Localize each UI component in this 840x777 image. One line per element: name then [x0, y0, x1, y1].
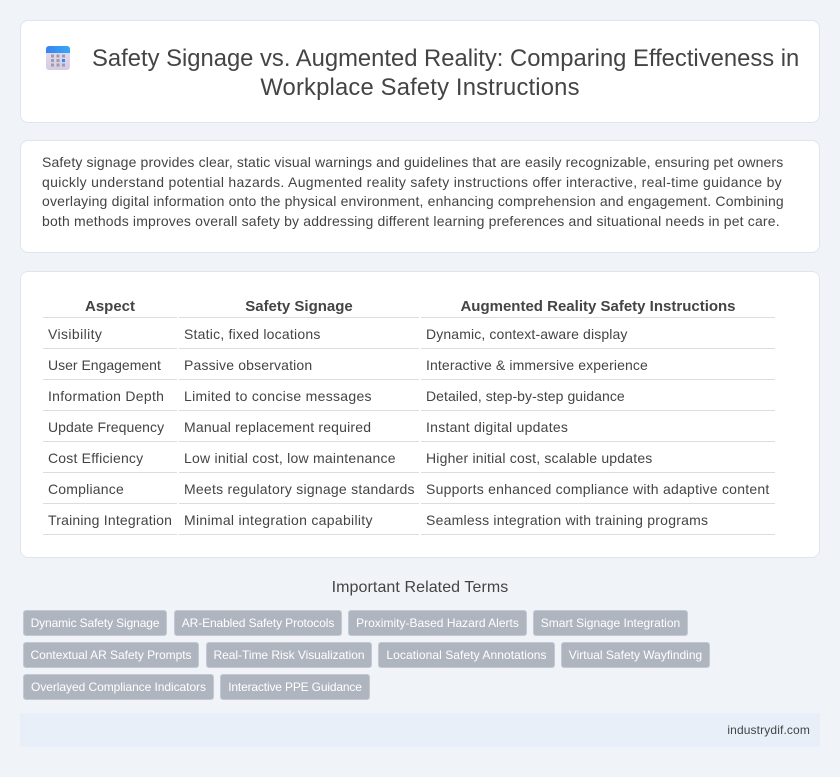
header: safety signage: Safety Signage: [245, 298, 353, 315]
row: update frequency: Instant digital updates: [426, 419, 568, 435]
row: compliance: [48, 481, 770, 497]
tag: Locational Safety Annotations: [386, 648, 547, 662]
title: [92, 45, 799, 101]
row: visibility: Static, fixed locations: [184, 326, 321, 342]
row: user engagement: User Engagement: [48, 357, 161, 373]
tag: Smart Signage Integration: [541, 616, 680, 630]
tag: Real-Time Risk Visualization: [214, 648, 364, 662]
related terms heading: Important Related Terms: [332, 579, 508, 596]
intro paragraph: [42, 154, 784, 229]
row: visibility: Dynamic, context-aware display: [426, 326, 628, 342]
title: Safety Signage vs. Augmented Reality: Comparing Effectiveness in: [92, 45, 799, 72]
row: information depth: [48, 388, 625, 404]
tag: [378, 642, 555, 668]
row: training integration: Training Integration: [48, 512, 172, 528]
row: compliance: Meets regulatory signage standards: [184, 481, 415, 497]
intro paragraph: overlaying digital information onto the physical environment, enhancing comprehension and engagement. Combining: [42, 193, 784, 209]
row: update frequency: Update Frequency: [48, 419, 164, 435]
row: information depth: Information Depth: [48, 388, 164, 404]
row: visibility: Visibility: [48, 326, 102, 342]
row: user engagement: Passive observation: [184, 357, 312, 373]
row: user engagement: Interactive & immersive experience: [426, 357, 648, 373]
panel: comparison table card: [20, 271, 820, 558]
panel: title card: [20, 20, 820, 123]
row: training integration: Seamless integration with training programs: [426, 512, 708, 528]
row: compliance: Supports enhanced compliance with adaptive content: [426, 481, 770, 497]
row: cost efficiency: [48, 450, 652, 466]
tag: [23, 642, 199, 668]
row: cost efficiency: Low initial cost, low maintenance: [184, 450, 396, 466]
tag: Contextual AR Safety Prompts: [31, 648, 191, 662]
tag: [206, 642, 372, 668]
row: training integration: Minimal integration capability: [184, 512, 373, 528]
row: update frequency: [48, 419, 568, 435]
row: visibility: [48, 326, 628, 342]
footer source: industrydif.com: [727, 723, 810, 737]
tag: [220, 674, 370, 700]
row: information depth: Detailed, step-by-step guidance: [426, 388, 625, 404]
row: cost efficiency: Higher initial cost, scalable updates: [426, 450, 652, 466]
title: Workplace Safety Instructions: [260, 74, 580, 101]
tag: [533, 610, 688, 636]
tag: [23, 674, 214, 700]
panel: intro text card: [20, 140, 820, 253]
tag: Virtual Safety Wayfinding: [569, 648, 702, 662]
tag: Overlayed Compliance Indicators: [31, 680, 206, 694]
tag: Dynamic Safety Signage: [31, 616, 159, 630]
footer bar: [20, 713, 820, 747]
row: information depth: Limited to concise messages: [184, 388, 372, 404]
tag: Interactive PPE Guidance: [228, 680, 362, 694]
intro paragraph: Safety signage provides clear, static visual warnings and guidelines that are easily recognizable, ensuring pet owners: [42, 154, 783, 170]
row: user engagement: [48, 357, 648, 373]
row: update frequency: Manual replacement required: [184, 419, 371, 435]
tag: [348, 610, 527, 636]
tag: [561, 642, 710, 668]
tag: [23, 610, 167, 636]
intro paragraph: quickly understand potential hazards. Augmented reality safety instructions offer interactive, real-time guidance by: [42, 174, 782, 190]
row: compliance: Compliance: [48, 481, 124, 497]
row: training integration: [48, 512, 708, 528]
icon: calendar grid: [46, 46, 70, 70]
tag: Proximity-Based Hazard Alerts: [356, 616, 519, 630]
header: aspect: Aspect: [85, 298, 135, 315]
header: AR: Augmented Reality Safety Instructions: [460, 298, 736, 315]
row: cost efficiency: Cost Efficiency: [48, 450, 143, 466]
tag: AR-Enabled Safety Protocols: [182, 616, 334, 630]
tag: [174, 610, 342, 636]
intro paragraph: both methods improves overall safety by addressing different learning preferences and situational needs in pet care.: [42, 213, 780, 229]
